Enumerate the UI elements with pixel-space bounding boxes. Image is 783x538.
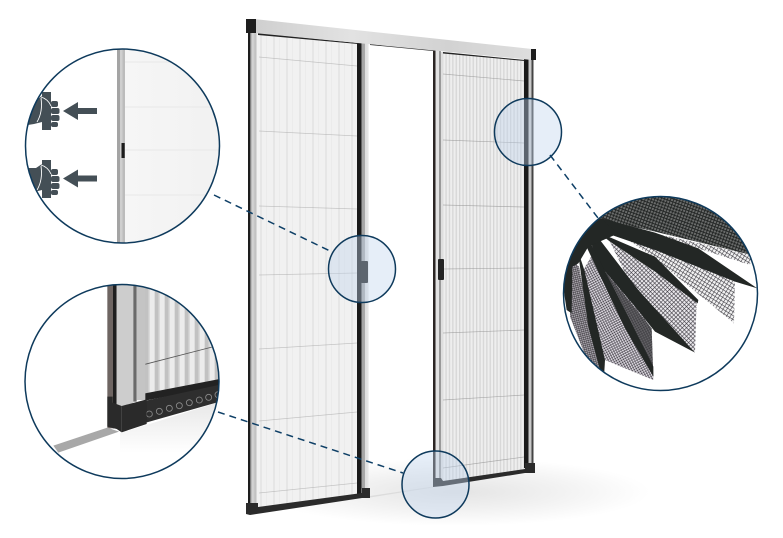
- zoomed handle: [122, 143, 125, 158]
- right door bottom rail: [433, 463, 535, 487]
- zoomed stile: [117, 45, 125, 245]
- mesh blade 5: [570, 260, 600, 370]
- centre opening top edge: [370, 44, 433, 51]
- mesh sliver: [659, 234, 751, 265]
- right screen mesh: [441, 52, 525, 482]
- top left end cap: [246, 19, 256, 33]
- mesh blade 2: [631, 242, 735, 324]
- left door frame: [248, 30, 369, 512]
- detail circle: pleated mesh: [562, 195, 758, 390]
- left screen mesh: [257, 33, 358, 508]
- detail circle: bottom corner: [25, 282, 223, 478]
- right door frame: [433, 50, 534, 480]
- dark fold lines: [562, 217, 757, 377]
- zoomed pleat chain: [146, 386, 218, 422]
- dashed connector: mesh detail: [550, 155, 598, 218]
- zoomed corner block: [107, 397, 147, 432]
- zoomed floor track: [53, 428, 119, 453]
- right door handle: [438, 259, 444, 280]
- floor track: [370, 486, 433, 498]
- mesh blade 4: [583, 250, 653, 380]
- icon: lower hand: [28, 160, 60, 198]
- mesh blade 3: [610, 242, 697, 353]
- detail circle: handle operation: [22, 45, 225, 245]
- magnifier: handle: [328, 236, 396, 302]
- dashed connector: handle detail: [214, 195, 330, 251]
- door assembly: [246, 19, 536, 515]
- magnifier: bottom corner: [402, 451, 469, 518]
- zoomed panel: [125, 50, 218, 242]
- left door handle: [361, 261, 368, 283]
- top rail: [254, 19, 532, 60]
- zoomed stiles: [107, 282, 145, 428]
- floor shadow: [260, 458, 650, 526]
- arrow: upper push: [63, 102, 97, 120]
- dashed connector: bottom detail: [218, 412, 403, 473]
- arrow: lower push: [63, 170, 97, 188]
- top right end cap: [531, 49, 536, 60]
- mesh blade 1 dark top: [595, 195, 752, 255]
- icon: upper hand: [28, 92, 60, 130]
- magnifier: mesh: [494, 98, 562, 166]
- darker part of blade 4: [605, 272, 654, 376]
- zoomed floor shadow: [120, 403, 216, 436]
- zoomed mesh: [145, 288, 218, 400]
- left door bottom rail: [246, 488, 370, 515]
